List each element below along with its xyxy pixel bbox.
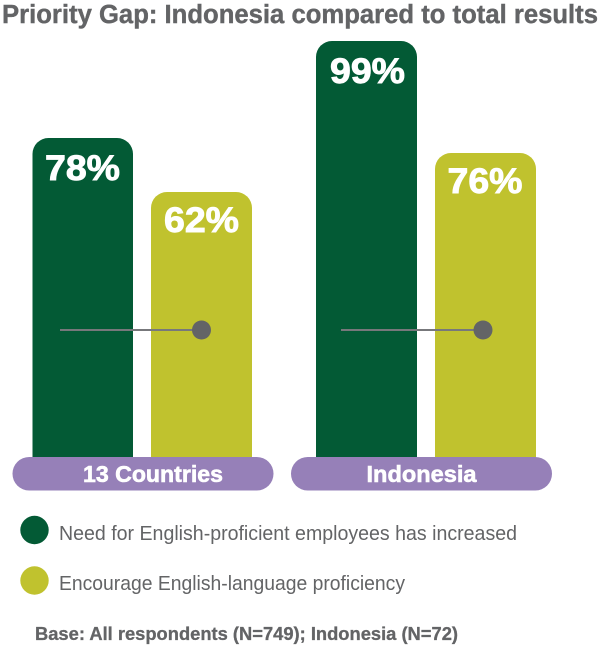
legend xyxy=(20,516,517,595)
bar: Indonesia need 99% xyxy=(316,41,417,470)
legend item: encourage English-language proficiency: Encourage English-language proficiency xyxy=(59,572,406,595)
bar: 13 Countries need 78% xyxy=(32,138,133,470)
label pill: Indonesia: Indonesia xyxy=(366,461,477,487)
gap connector: 13 Countries xyxy=(60,320,211,340)
base note: Base: All respondents (N=749); Indonesia (N=72) xyxy=(35,624,458,644)
panel: Indonesia xyxy=(291,41,552,490)
bar: Indonesia encourage 76%: 76% xyxy=(448,162,522,201)
label pill: Indonesia xyxy=(291,457,552,490)
bar: 13 Countries encourage 62% xyxy=(151,192,252,470)
bar: Indonesia encourage 76% xyxy=(435,153,536,470)
legend item: encourage English-language proficiency xyxy=(20,566,406,595)
bar: 13 Countries need 78%: 78% xyxy=(45,149,120,188)
bar: 13 Countries encourage 62%: 62% xyxy=(164,201,239,240)
bar: Indonesia need 99%: 99% xyxy=(330,52,405,91)
legend item: need for English-proficient employees: Need for English-proficient employees has increased xyxy=(59,522,517,545)
gap connector: Indonesia xyxy=(341,320,492,340)
label pill: 13 Countries: 13 Countries xyxy=(83,461,223,487)
title: Priority Gap: Indonesia compared to total results xyxy=(2,1,598,29)
label pill: 13 Countries xyxy=(12,457,274,490)
panel: 13 Countries xyxy=(12,138,274,490)
